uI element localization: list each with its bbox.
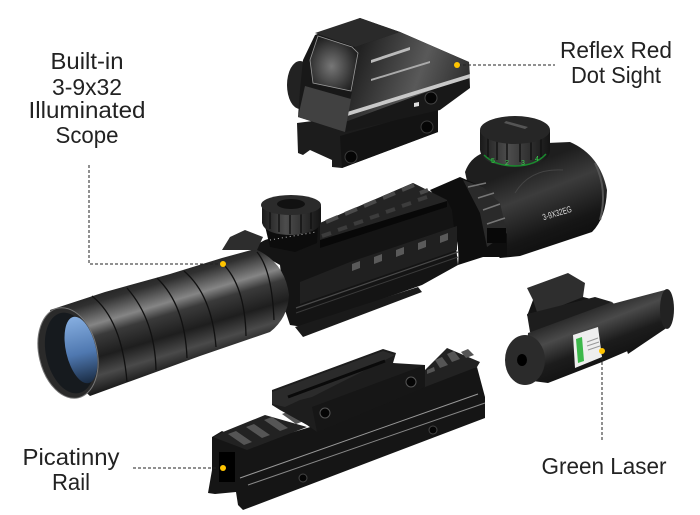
laser mount xyxy=(527,273,612,335)
label: Built-in 3-9x32 Illuminated Scope: Scope xyxy=(56,122,118,148)
turret cap with green numbers: 4 xyxy=(535,156,539,163)
eyepiece bell xyxy=(465,142,607,258)
tube body with rails xyxy=(250,183,458,337)
collar ring xyxy=(430,177,507,265)
marker: rail xyxy=(220,465,226,471)
top rail xyxy=(320,183,447,247)
sight adjuster screw xyxy=(425,92,437,104)
turret cap with green numbers xyxy=(480,116,550,167)
marker: scope xyxy=(220,261,226,267)
rail end window xyxy=(219,452,235,482)
laser rear tube xyxy=(612,290,668,354)
label: Picatinny Rail: Picatinny xyxy=(22,444,120,470)
laser info sticker xyxy=(573,327,602,368)
sight rear knob xyxy=(287,61,313,109)
turret cap with green numbers: 5 xyxy=(491,158,495,165)
leader line: laser xyxy=(601,352,603,442)
label: Reflex Red Dot Sight: Dot Sight xyxy=(571,62,662,88)
marker: sight xyxy=(454,62,460,68)
green laser xyxy=(505,273,674,385)
leader line: scope xyxy=(89,165,222,264)
picatinny riser rail xyxy=(208,348,485,510)
leader line: sight xyxy=(458,64,555,66)
objective lens xyxy=(29,302,107,404)
sight window xyxy=(310,36,358,91)
laser body xyxy=(525,302,630,383)
label: Built-in 3-9x32 Illuminated Scope: Illuminated xyxy=(28,97,146,123)
label: Green Laser: Green Laser xyxy=(542,453,667,479)
small turret knob xyxy=(222,195,321,252)
label: Picatinny Rail: Rail xyxy=(52,469,90,495)
turret cap with green numbers: 3 xyxy=(521,160,525,167)
label: Reflex Red Dot Sight: Reflex Red xyxy=(560,37,672,63)
rail grooves xyxy=(240,394,478,478)
riser upper block xyxy=(272,349,425,432)
model marking: 3-9X32EG xyxy=(541,204,573,222)
rail top teeth left xyxy=(213,415,307,450)
sight front hood xyxy=(298,86,351,132)
laser front face xyxy=(505,335,545,385)
sight base mount xyxy=(297,105,438,168)
label: Built-in 3-9x32 Illuminated Scope: 3-9x32 xyxy=(52,74,122,100)
side rail xyxy=(300,226,457,304)
rail top teeth right xyxy=(425,348,480,387)
leader line: rail xyxy=(133,467,218,469)
reflex red dot sight xyxy=(287,18,470,168)
rear objective tube xyxy=(50,249,289,396)
label: Reflex Red Dot Sight xyxy=(560,37,672,88)
marker: laser xyxy=(599,348,605,354)
label: Built-in 3-9x32 Illuminated Scope xyxy=(28,48,146,148)
bottom rail xyxy=(295,287,422,337)
turret cap with green numbers: 2 xyxy=(505,160,509,167)
rail base xyxy=(208,367,485,510)
sight body xyxy=(298,18,470,132)
label: Picatinny Rail xyxy=(22,444,120,495)
label: Built-in 3-9x32 Illuminated Scope: Built-in xyxy=(50,48,124,74)
main scope xyxy=(29,116,607,404)
